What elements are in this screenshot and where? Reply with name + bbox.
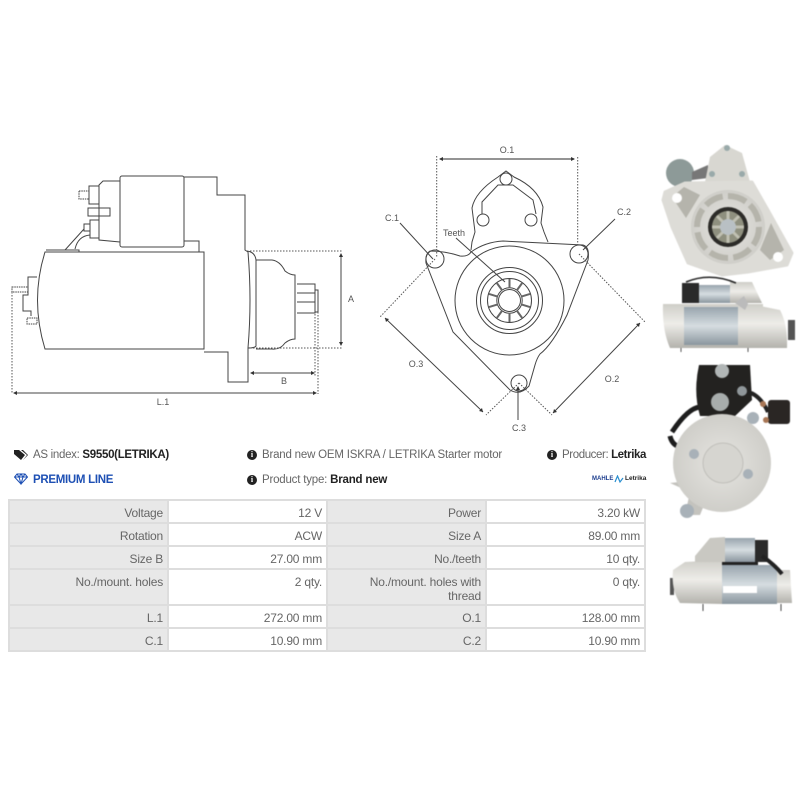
specifications table: O.1 xyxy=(462,611,481,625)
label and leader C.2: C.2 xyxy=(617,207,631,217)
specifications table: thread xyxy=(448,589,481,603)
specifications table: Voltage xyxy=(124,506,163,520)
specifications table: 272.00 mm xyxy=(264,611,322,625)
label and leader Teeth: Teeth xyxy=(443,228,465,238)
label and leader C.1 xyxy=(385,213,433,259)
specifications table: Size A xyxy=(448,529,481,543)
specifications table: ACW xyxy=(295,529,322,543)
label and leader C.2 xyxy=(583,207,631,250)
info: AS index: AS index: S9550(LETRIKA) xyxy=(33,449,169,461)
specifications table: 128.00 mm xyxy=(582,611,640,625)
specifications table: 12 V xyxy=(298,506,322,520)
specifications table: 10.90 mm xyxy=(588,634,640,648)
specifications table: 10.90 mm xyxy=(270,634,322,648)
info: description: Brand new OEM ISKRA / LETRIKA Starter motor xyxy=(262,449,502,461)
specifications table: No./mount. holes xyxy=(75,575,163,589)
dimension A: A xyxy=(348,294,354,304)
dimension B: B xyxy=(281,376,287,386)
label and leader C.1: C.1 xyxy=(385,213,399,223)
info: product type: i xyxy=(251,475,253,484)
starter motor side outline xyxy=(12,176,318,382)
logo: Mahle Letrika: Letrika xyxy=(625,475,646,482)
dimension L.1 xyxy=(12,292,318,407)
dimension O.3 xyxy=(380,259,519,415)
specifications table xyxy=(8,499,646,652)
logo: Mahle Letrika xyxy=(592,475,646,483)
specifications table: 3.20 kW xyxy=(597,506,640,520)
dimension O.3: O.3 xyxy=(409,359,423,369)
premium line badge: PREMIUM LINE xyxy=(33,474,113,486)
specifications table: No./teeth xyxy=(434,552,481,566)
specifications table: No./mount. holes with xyxy=(370,575,481,589)
label and leader C.3 xyxy=(512,386,526,433)
specifications table: Power xyxy=(448,506,481,520)
specifications table: C.1 xyxy=(145,634,163,648)
label and leader Teeth xyxy=(443,228,505,282)
logo: Mahle Letrika: MAHLE xyxy=(592,476,613,482)
photo: starter side view xyxy=(663,277,795,352)
dimension O.1: O.1 xyxy=(500,145,514,155)
dimension B xyxy=(250,314,315,386)
specifications table: 10 qty. xyxy=(606,552,640,566)
specifications table: 0 qty. xyxy=(613,575,640,589)
specifications table: 27.00 mm xyxy=(270,552,322,566)
specifications table: Size B xyxy=(130,552,163,566)
specifications table: C.2 xyxy=(463,634,481,648)
photo: starter rear view xyxy=(670,364,790,518)
side view technical drawing xyxy=(12,145,646,433)
info: product type: Product type: Brand new xyxy=(262,474,387,486)
specifications table: L.1 xyxy=(147,611,163,625)
info: description: i xyxy=(251,450,253,459)
specifications table: Rotation xyxy=(120,529,163,543)
info: producer: Producer: Letrika xyxy=(562,449,646,461)
dimension A xyxy=(250,251,354,348)
specifications table: 89.00 mm xyxy=(588,529,640,543)
photo: starter front view xyxy=(663,145,792,275)
label and leader C.3: C.3 xyxy=(512,423,526,433)
info: producer: i xyxy=(551,450,553,459)
dimension O.2: O.2 xyxy=(605,374,619,384)
dimension O.1 xyxy=(437,145,578,258)
photo: starter side view with label xyxy=(670,537,792,611)
dimension O.2 xyxy=(519,254,645,415)
dimension L.1: L.1 xyxy=(157,397,169,407)
specifications table: 2 qty. xyxy=(295,575,322,589)
front view flange outline xyxy=(426,171,588,392)
